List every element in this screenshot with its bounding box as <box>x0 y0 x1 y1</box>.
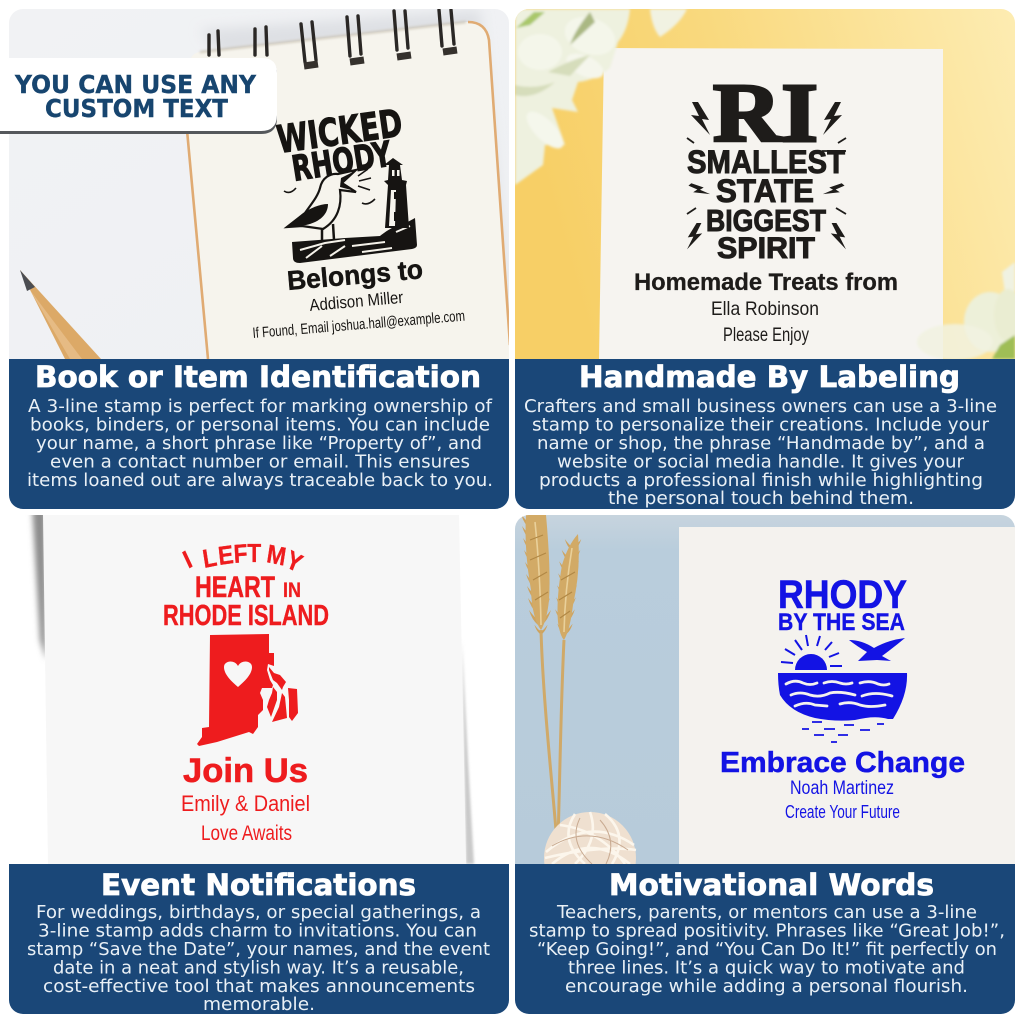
cream card <box>679 527 1015 864</box>
badge line 1: YOU CAN USE ANY <box>14 70 256 99</box>
description: even a contact number or email. This ensures <box>50 452 470 472</box>
seabird <box>849 638 905 661</box>
heart <box>224 662 252 687</box>
caption band <box>9 359 509 509</box>
description: items loaned out are always traceable back to you. <box>27 470 493 491</box>
sun and rays <box>781 635 842 670</box>
description: your name, a short phrase like “Property of”, and <box>36 433 482 454</box>
right shadow <box>462 640 474 864</box>
description <box>27 396 493 491</box>
description: cost-effective tool that makes announcements <box>43 976 475 997</box>
description <box>524 396 997 509</box>
panel: book or item identification <box>9 9 515 509</box>
description: name or shop, the phrase “Handmade by”, and a <box>537 433 985 454</box>
description: For weddings, birthdays, or special gatherings, a <box>36 902 481 923</box>
description: A 3-line stamp is perfect for marking ownership of <box>28 396 493 417</box>
slogan <box>687 144 845 265</box>
rhody: RHODY <box>778 573 907 617</box>
notebook photo background <box>9 9 515 360</box>
panel: motivational words <box>515 514 1015 1014</box>
sea bowl with waves <box>778 673 907 742</box>
description: date in a neat and stylish way. It’s a reusable, <box>53 958 464 978</box>
email: If Found, Email joshua.hall@example.com <box>252 308 466 342</box>
please enjoy: Please Enjoy <box>723 325 809 346</box>
name: Addison Miller <box>309 288 404 315</box>
slogan: SPIRIT <box>717 232 815 265</box>
heading: Motivational Words <box>609 868 934 902</box>
love awaits: Love Awaits <box>201 822 292 845</box>
RI letters: RI <box>713 67 818 160</box>
description: stamp “Save the Date”, your names, and the event <box>27 939 490 960</box>
description: Teachers, parents, or mentors can use a 3-line <box>556 902 977 923</box>
small ray dashes <box>687 138 846 214</box>
panel: handmade by labeling <box>515 9 1022 509</box>
white paper <box>43 515 466 864</box>
slogan: SMALLEST <box>687 144 845 180</box>
description: memorable. <box>203 994 315 1015</box>
white flowers top left <box>515 9 687 185</box>
description: Crafters and small business owners can use a 3-line <box>524 396 997 417</box>
belongs to: Belongs to <box>286 254 424 296</box>
description <box>27 902 490 1015</box>
yellow paper background <box>515 9 1015 359</box>
create your future: Create Your Future <box>785 801 900 822</box>
pencil <box>20 270 101 359</box>
description: 3-line stamp adds charm to invitations. You can <box>38 920 477 942</box>
slogan: STATE <box>716 173 814 209</box>
left shadow <box>32 505 46 660</box>
description: “Keep Going!”, and “You Can Do It!” fit perfectly on <box>537 939 997 960</box>
wicked rhody lettering: RHODY <box>289 135 395 190</box>
join us: Join Us <box>183 752 308 790</box>
lighthouse <box>384 158 409 228</box>
badge line 2: CUSTOM TEXT <box>45 94 228 123</box>
badge: custom text <box>0 58 277 134</box>
blue background <box>515 515 1015 864</box>
stamp: rhody by the sea <box>720 573 965 822</box>
seagull on rocks <box>284 169 417 263</box>
description <box>529 902 1005 997</box>
wicked rhody lettering: WICKED <box>274 101 405 162</box>
description: the personal touch behind them. <box>608 488 914 509</box>
heading: Book or Item Identification <box>35 360 481 394</box>
description: three lines. It’s a quick way to motivate and <box>568 958 965 978</box>
I left my arc: I LEFT MY <box>179 540 306 579</box>
wheat stalks <box>521 514 581 842</box>
notebook orange edges <box>187 22 510 359</box>
white background <box>9 515 509 864</box>
in: IN <box>283 579 301 602</box>
stamp: wicked rhody <box>252 101 466 342</box>
name: Noah Martinez <box>790 778 894 799</box>
white card <box>599 48 943 359</box>
heart: HEART <box>195 571 275 604</box>
description: products a professional finish while highlighting <box>539 470 983 491</box>
slogan: BIGGEST <box>706 203 826 238</box>
stamp: heart in rhode island <box>163 540 329 845</box>
Rhode Island map with heart <box>197 634 298 746</box>
caption band <box>9 864 509 1015</box>
spiral binding <box>209 10 457 66</box>
notebook top edge <box>200 22 466 52</box>
description: encourage while adding a personal flourish. <box>565 976 968 997</box>
by the sea: BY THE SEA <box>778 609 905 636</box>
homemade treats from: Homemade Treats from <box>634 269 898 296</box>
description: stamp to spread positivity. Phrases like “Great Job!”, <box>529 920 1005 942</box>
description: website or social media handle. It gives your <box>557 452 965 472</box>
embrace change: Embrace Change <box>720 747 965 779</box>
caption band <box>515 864 1015 1014</box>
heading: Handmade By Labeling <box>579 360 960 394</box>
description: stamp to personalize their creations. Include your <box>532 414 990 436</box>
rhode island: RHODE ISLAND <box>163 600 329 632</box>
caption band <box>515 359 1015 509</box>
notebook page <box>187 22 510 359</box>
wicked rhody lettering <box>276 109 402 182</box>
twine ball <box>544 812 636 904</box>
name: Ella Robinson <box>711 298 819 320</box>
stamp: RI smallest state <box>686 84 846 259</box>
description: books, binders, or personal items. You can include <box>30 414 490 436</box>
lightning bolts <box>687 102 846 249</box>
names: Emily & Daniel <box>181 791 310 816</box>
heading: Event Notifications <box>101 868 416 902</box>
panel: event notifications <box>9 505 509 1015</box>
white flowers bottom right <box>917 262 1022 360</box>
